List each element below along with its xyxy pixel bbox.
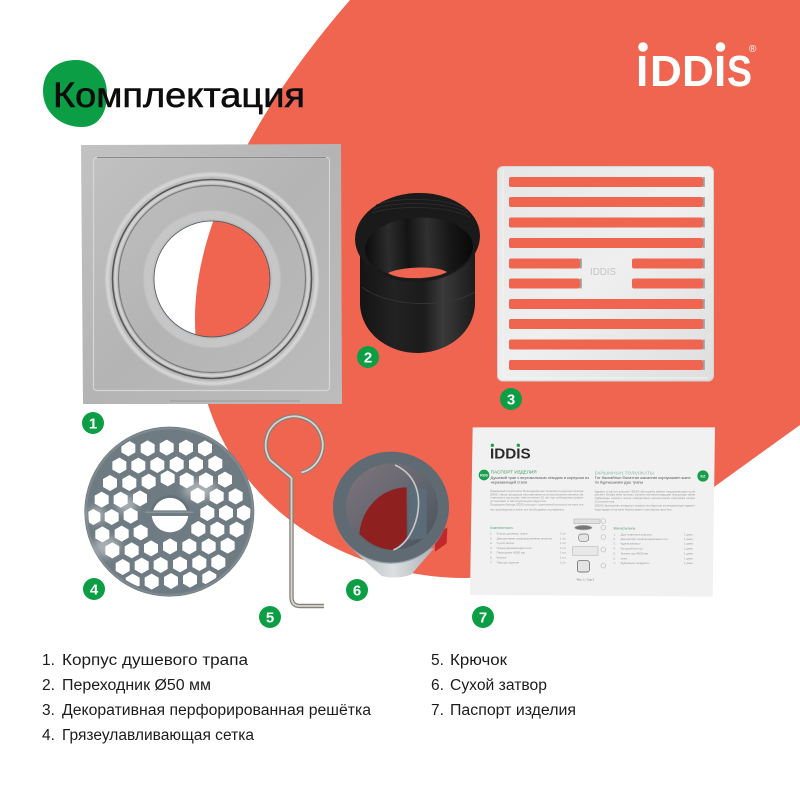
item 3: decorative grate: IDDIS bbox=[590, 267, 616, 278]
passport left list: 1 шт bbox=[560, 546, 567, 550]
passport body text: установки и эксплуатации изделия. bbox=[490, 499, 547, 503]
badge 3: 3 bbox=[507, 392, 515, 408]
passport body text: бақылаудан өтеді және барлық қажетті сертификаттары бар. bbox=[595, 508, 672, 512]
badge 4 bbox=[83, 578, 105, 600]
passport right list: 1. bbox=[613, 532, 616, 536]
parts list: right column: 7. bbox=[431, 702, 444, 719]
passport body text: 10 жыл қызмет етеді. bbox=[595, 499, 615, 503]
passport left list: 1 шт bbox=[560, 536, 567, 540]
parts list: left column bbox=[42, 652, 371, 744]
passport headings: ПАСПОРТ ИЗДЕЛИЯ bbox=[491, 470, 537, 475]
passport right list: 1 дана bbox=[684, 551, 693, 555]
badge 3 bbox=[500, 388, 522, 410]
passport left list: 6. bbox=[490, 556, 493, 560]
passport right list: 1 дана bbox=[684, 547, 693, 551]
parts list: right column: Паспорт изделия bbox=[450, 702, 576, 719]
parts list: left column: 4. bbox=[42, 727, 55, 744]
passport right list: 1 дана bbox=[684, 556, 693, 560]
passport left list: 1 шт bbox=[560, 551, 567, 555]
passport right list: Жалғастыр 45/50 мм bbox=[621, 551, 648, 555]
passport headings bbox=[491, 468, 691, 484]
passport left list: Корпус душевого трапа bbox=[497, 532, 528, 536]
item 2: black adapter bbox=[353, 190, 482, 353]
passport left list: Комплектность bbox=[490, 526, 514, 530]
passport left list: Переходник 45/50 мм bbox=[497, 551, 525, 555]
passport body text: IDDIS. Наша продукция изготавливается из высококачественных ма bbox=[490, 492, 584, 496]
passport right list: 2. bbox=[613, 537, 616, 541]
passport page footer: Рис. 1 / Сур-1 bbox=[577, 577, 595, 581]
passport right list: Бұйымның төлқұжаты bbox=[621, 561, 649, 565]
parts list: left column: 3. bbox=[42, 702, 55, 719]
passport left list: Декоративная перфорированная решётка bbox=[497, 536, 552, 540]
badge 5: 5 bbox=[266, 610, 274, 626]
logo: iDDIS white bbox=[636, 42, 757, 96]
heading: Комплектация bbox=[53, 76, 305, 115]
parts list: left column: Грязеулавливающая сетка bbox=[62, 727, 254, 744]
passport right list: Құрғақ жапқыш bbox=[621, 542, 641, 546]
passport headings: Душевой трап с вертикальным отводом и корпусом из bbox=[491, 476, 589, 480]
item 1: drain body bbox=[81, 144, 342, 404]
passport right list: Кір ұстайтын тор bbox=[621, 547, 643, 551]
passport right list: 1 дана bbox=[684, 532, 693, 536]
parts list: left column: 2. bbox=[42, 677, 55, 694]
passport headings: Тот баспайтын болаттан жасалған корпусымен және bbox=[595, 476, 691, 480]
passport right list: 1 дана bbox=[684, 561, 693, 565]
badge 5 bbox=[259, 606, 281, 628]
passport body text: рахмет. Біздің өнім жоғары сапалы материалдардан жасалады және bbox=[595, 493, 696, 497]
badge 1 bbox=[82, 412, 104, 434]
passport right list bbox=[613, 527, 693, 565]
badge 1: 1 bbox=[89, 416, 97, 432]
passport right list: Душ трапының корпусы bbox=[621, 532, 652, 536]
parts list: right column: Крючок bbox=[450, 652, 507, 669]
title block bbox=[43, 60, 305, 127]
badge 4: 4 bbox=[90, 582, 99, 598]
parts list: left column: Корпус душевого трапа bbox=[62, 652, 248, 669]
passport exploded diagram bbox=[573, 519, 606, 572]
item 7: product passport bbox=[470, 427, 715, 597]
badge 6: 6 bbox=[353, 582, 361, 600]
background coral shape bbox=[195, 0, 800, 578]
badge 6 bbox=[346, 579, 368, 601]
passport right list: 4. bbox=[613, 547, 616, 551]
passport left list: 3. bbox=[490, 541, 493, 545]
passport body text: териалов и прослужит вам не менее 10 лет при соблюдении правил bbox=[490, 496, 584, 500]
parts list: right column: 6. bbox=[431, 677, 444, 694]
item 3: decorative grate bbox=[497, 166, 714, 382]
badge 2: 2 bbox=[364, 350, 372, 366]
item 5: hook bbox=[266, 416, 324, 606]
passport left list: 4. bbox=[490, 546, 493, 550]
passport right list: 6. bbox=[613, 556, 616, 560]
passport body text: IDDIS брендінің өнімдері өндірістің барлық кезеңдерінде мұқият bbox=[595, 503, 696, 507]
passport headings: тік бұрғышымен душ трапы bbox=[595, 480, 644, 484]
passport left list: Крючок bbox=[497, 556, 507, 560]
parts list: right column: Сухой затвор bbox=[450, 677, 547, 694]
passport left list bbox=[490, 526, 567, 564]
passport body text: Құрметті сатып алушы! IDDIS брендінің өнімін таңдағаныңыз үшін bbox=[595, 489, 696, 493]
passport body text: бұйымды орнату және пайдалану ережелерін сақтаған кезде bbox=[595, 496, 696, 500]
passport right list: Декоративті перфорацияланған тор bbox=[621, 537, 668, 541]
passport left list: 7. bbox=[490, 560, 493, 564]
passport left list: 1 шт bbox=[560, 541, 567, 545]
passport body text: Уважаемый покупатель! Благодарим вас за выбор продукции бренда bbox=[490, 489, 584, 493]
language badges bbox=[479, 470, 709, 482]
item 6: dry seal bbox=[333, 452, 449, 578]
logo: iDDIS white: ® bbox=[749, 44, 757, 55]
passport right list: 7. bbox=[613, 561, 616, 565]
passport headings: нержавеющей стали bbox=[491, 480, 527, 484]
parts list: right column bbox=[431, 652, 576, 719]
passport right list: 5. bbox=[613, 551, 616, 555]
passport body text: пах производства и имеет все необходимые сертификаты. bbox=[490, 508, 565, 512]
passport body text bbox=[490, 489, 696, 512]
passport right list: Жинақтылығы bbox=[613, 527, 636, 531]
passport right list: 1 дана bbox=[684, 542, 693, 546]
passport left list: Сухой затвор bbox=[497, 541, 515, 545]
parts list: left column: Декоративная перфорированная решётка bbox=[62, 702, 371, 719]
passport right list: 1 дана bbox=[684, 537, 693, 541]
passport body text: Продукция бренда IDDIS проходит тщательный контроль на всех эта bbox=[490, 502, 584, 506]
badge 2 bbox=[357, 346, 379, 368]
passport left list: 1. bbox=[490, 532, 493, 536]
parts list: right column: 5. bbox=[431, 652, 444, 669]
passport right list: 3. bbox=[613, 542, 616, 546]
passport left list: 2. bbox=[490, 536, 493, 540]
badge 7: 7 bbox=[479, 610, 487, 626]
language badges: RUS bbox=[480, 474, 488, 478]
passport left list: 1 шт bbox=[560, 560, 567, 564]
logo: iDDIS white: IDDI bbox=[636, 47, 726, 96]
passport left list: Грязеулавливающая сетка bbox=[497, 546, 532, 550]
passport left list: 1 шт bbox=[560, 532, 567, 536]
item 4: strainer mesh bbox=[84, 427, 254, 597]
logo: iDDIS white: S bbox=[727, 47, 752, 96]
green blob bbox=[43, 60, 107, 127]
passport left list: 5. bbox=[490, 551, 493, 555]
passport headings: БҰЙЫМНЫҢ ТӨЛҚҰЖАТЫ bbox=[595, 468, 654, 475]
parts list: left column: 1. bbox=[42, 652, 55, 669]
passport left list: Паспорт изделия bbox=[497, 560, 520, 564]
badge 7 bbox=[472, 606, 494, 628]
passport right list: Ілгек bbox=[621, 556, 628, 560]
parts list: left column: Переходник Ø50 мм bbox=[62, 677, 211, 694]
passport logo: IDDIS bbox=[490, 447, 531, 463]
language badges: KZ bbox=[701, 475, 706, 479]
passport left list: 1 шт bbox=[560, 556, 567, 560]
